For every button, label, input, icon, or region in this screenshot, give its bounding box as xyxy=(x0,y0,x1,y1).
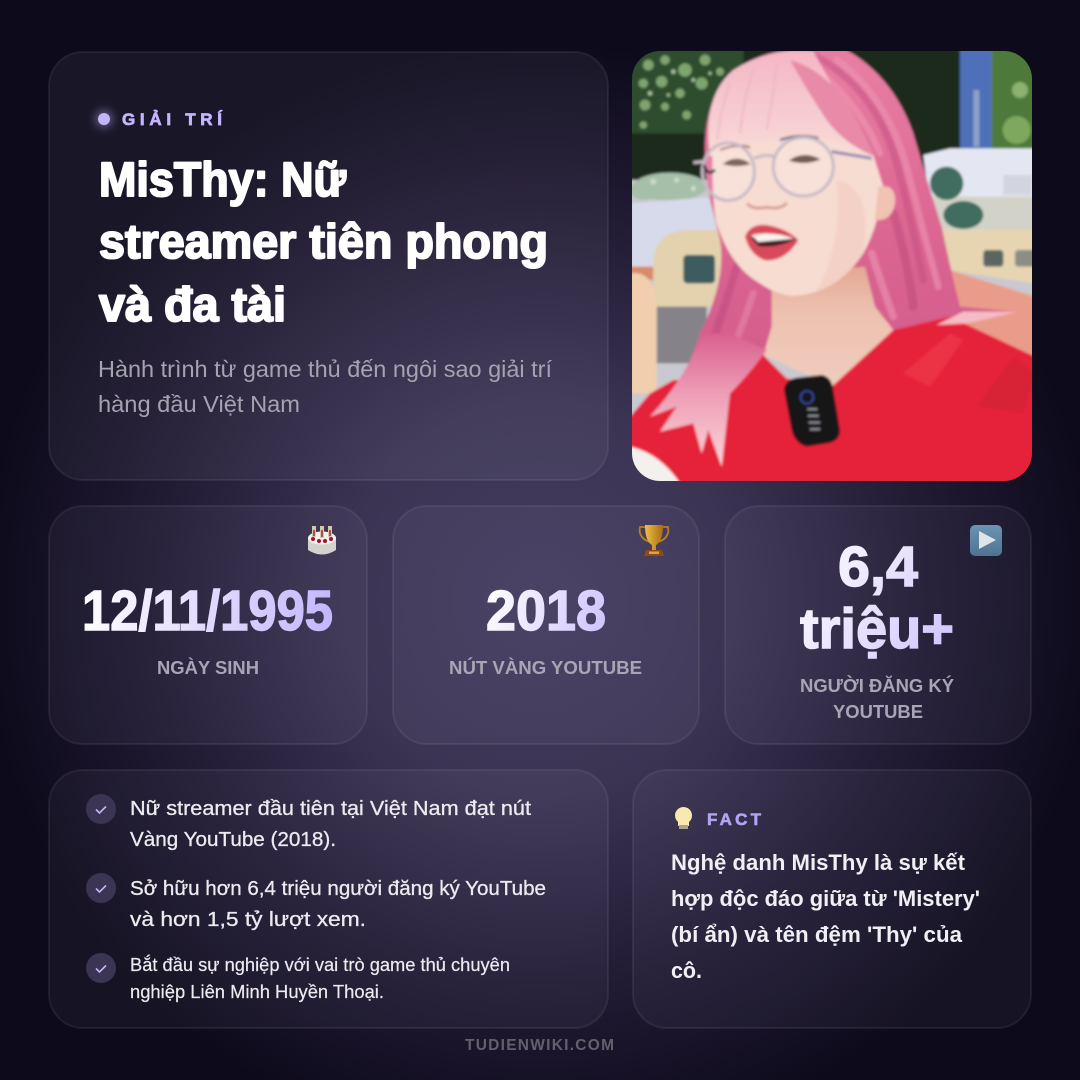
value: triệu+ xyxy=(800,597,954,661)
stat card: birth date xyxy=(49,506,367,744)
footer credit: TUDIENWIKI.COM xyxy=(465,1037,614,1054)
eyes and brows xyxy=(720,136,821,166)
label: YOUTUBE xyxy=(833,702,923,722)
value: 2018 xyxy=(486,579,606,643)
subtitle xyxy=(98,356,553,417)
fact text: cô. xyxy=(671,958,702,983)
value: 6,4 xyxy=(838,535,918,599)
panel: hero title xyxy=(49,52,608,480)
point 2: Sở hữu hơn 6,4 triệu người đăng ký YouTube xyxy=(130,877,546,900)
lower left hair wisps xyxy=(650,333,767,467)
title xyxy=(99,154,548,332)
fringe xyxy=(708,51,871,157)
icon: birthday cake xyxy=(308,526,336,554)
panel: key points xyxy=(49,770,608,1028)
point 1: Nữ streamer đầu tiên tại Việt Nam đạt nút xyxy=(130,797,531,820)
label: NÚT VÀNG YOUTUBE xyxy=(449,657,642,678)
point 1 xyxy=(86,794,531,851)
icon: light bulb xyxy=(675,807,692,829)
ear xyxy=(875,186,895,220)
hair streaks xyxy=(713,57,938,357)
panel: fact xyxy=(633,770,1031,1028)
panel: portrait photo xyxy=(630,40,1040,490)
point 2 xyxy=(86,873,546,931)
icon: trophy xyxy=(640,525,668,556)
fact text xyxy=(671,850,980,983)
fact heading: FACT xyxy=(707,810,762,829)
fact text: hợp độc đáo giữa từ 'Mistery' xyxy=(671,886,980,911)
stat card: subscribers xyxy=(725,506,1031,744)
title: streamer tiên phong xyxy=(99,216,548,269)
title: MisThy: Nữ xyxy=(99,154,346,207)
point 3: Bắt đầu sự nghiệp với vai trò game thủ chuyên xyxy=(130,954,510,975)
title: và đa tài xyxy=(99,279,286,332)
icon: play button xyxy=(970,525,1002,556)
subtitle: hàng đầu Việt Nam xyxy=(98,391,300,417)
label: NGÀY SINH xyxy=(157,657,259,678)
label: NGƯỜI ĐĂNG KÝ xyxy=(800,675,954,696)
point 3: nghiệp Liên Minh Huyền Thoại. xyxy=(130,982,384,1002)
subtitle: Hành trình từ game thủ đến ngôi sao giải trí xyxy=(98,356,553,382)
shirt xyxy=(630,317,1035,487)
lips xyxy=(745,225,798,261)
category tag: GIẢI TRÍ xyxy=(122,110,223,129)
point 3 xyxy=(86,953,510,1002)
face xyxy=(712,127,883,296)
stat card: golden button xyxy=(393,506,699,744)
value xyxy=(800,535,954,661)
nose xyxy=(747,203,787,208)
microphone xyxy=(784,375,840,447)
neck xyxy=(763,267,893,387)
point 1: Vàng YouTube (2018). xyxy=(130,828,336,851)
glasses xyxy=(693,137,872,200)
label xyxy=(800,675,954,722)
hair back xyxy=(692,51,1013,356)
fact text: Nghệ danh MisThy là sự kết xyxy=(671,850,965,875)
fact text: (bí ẩn) và tên đệm 'Thy' của xyxy=(671,922,962,947)
value: 12/11/1995 xyxy=(82,579,333,643)
point 2: và hơn 1,5 tỷ lượt xem. xyxy=(130,908,366,931)
